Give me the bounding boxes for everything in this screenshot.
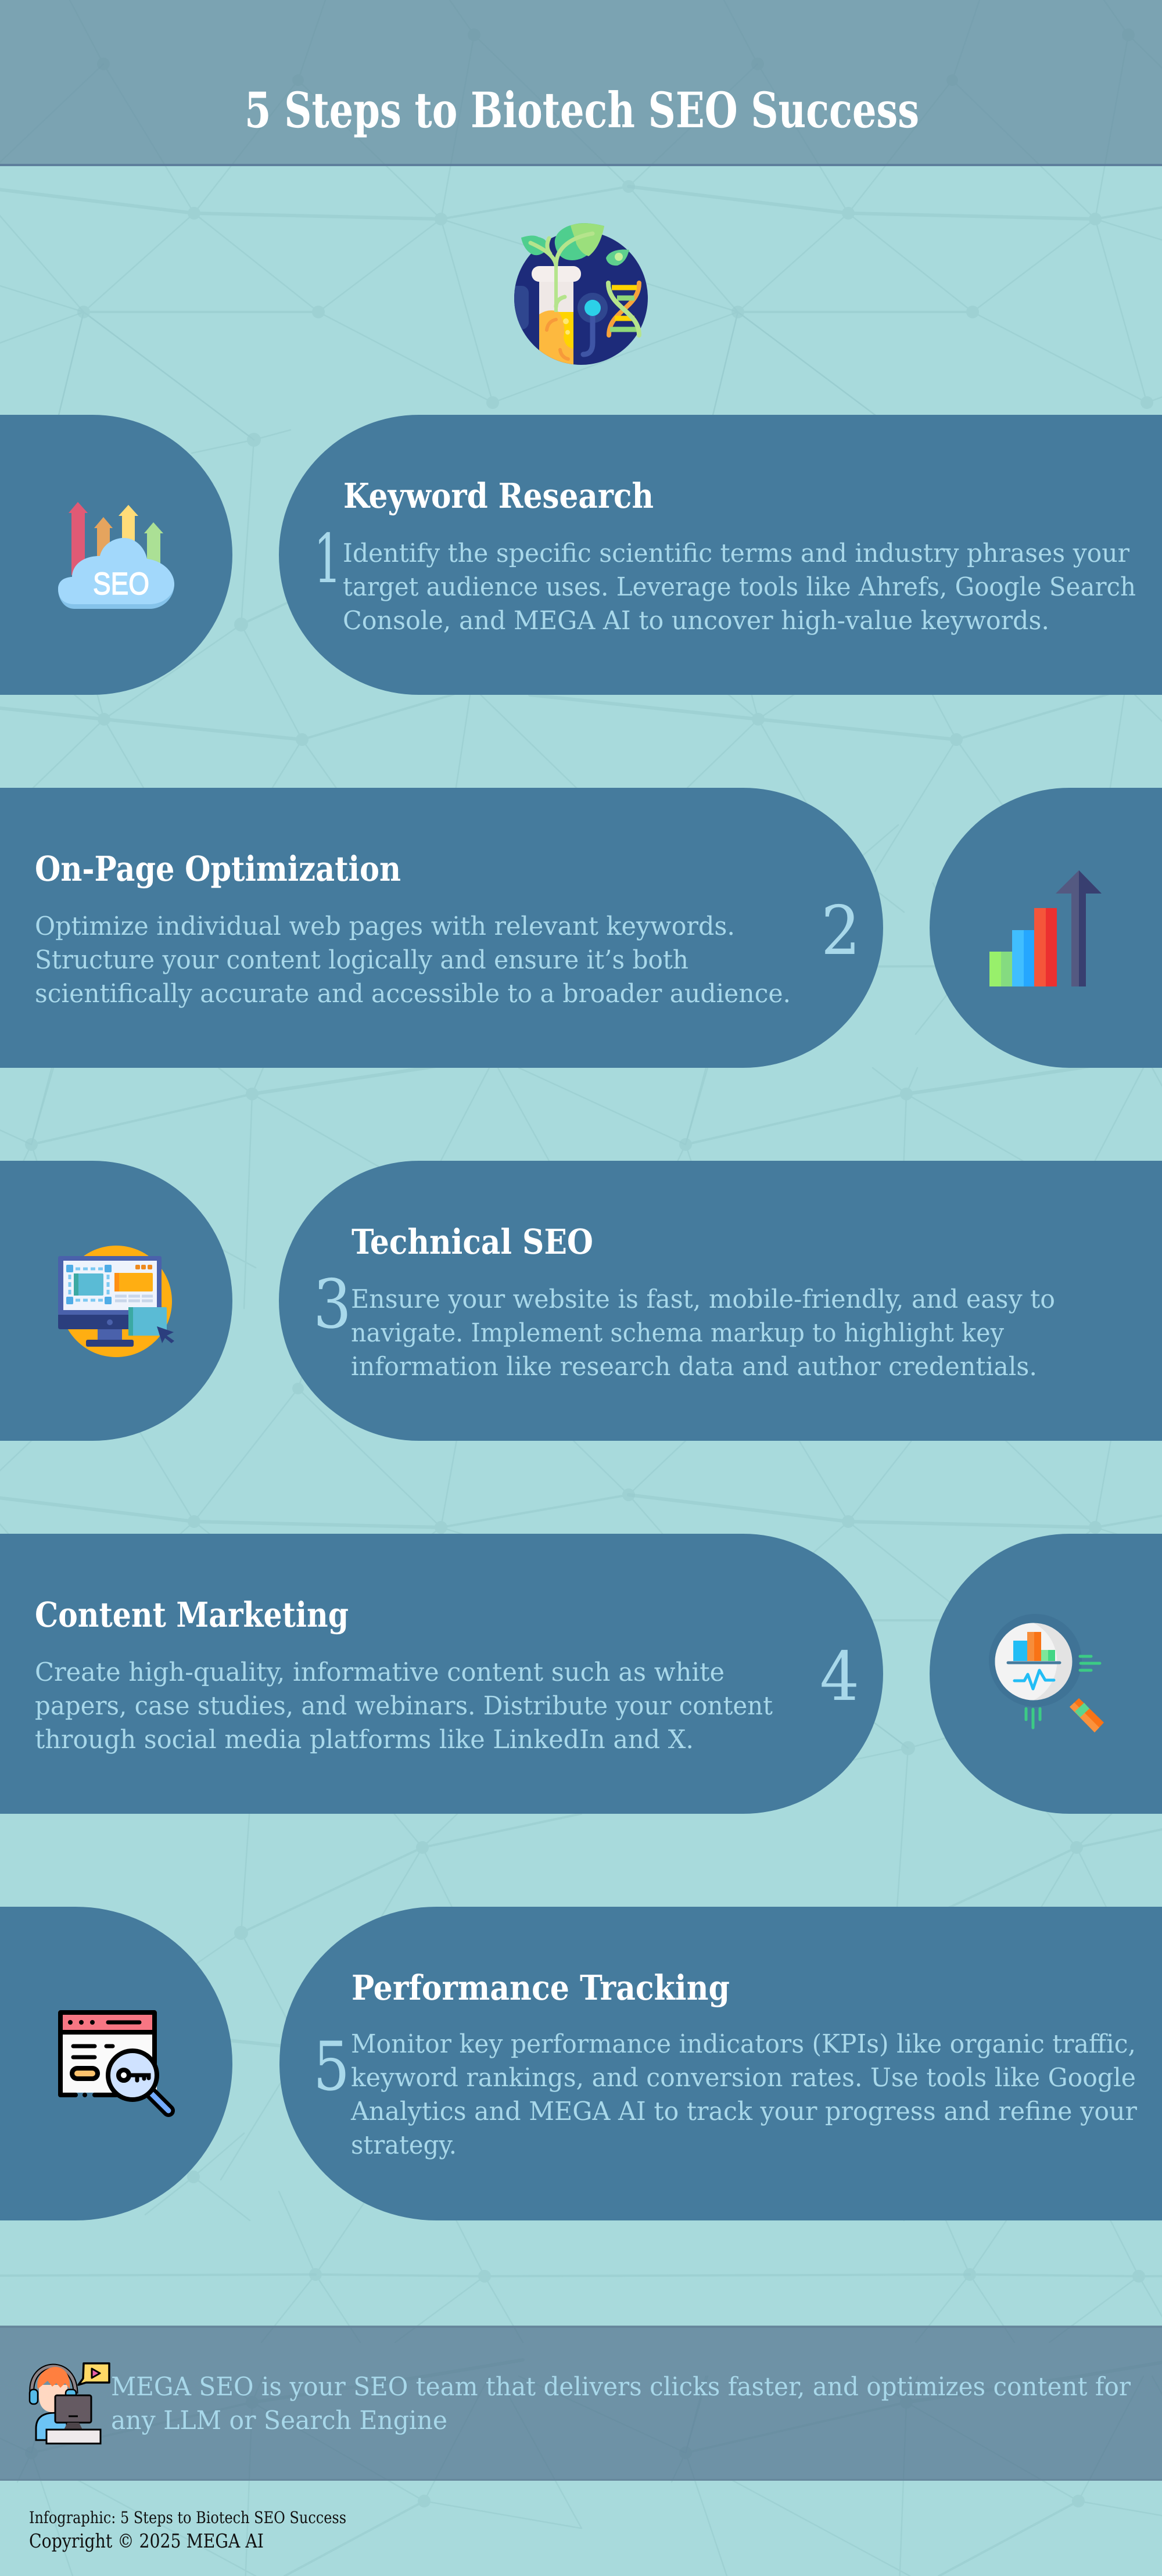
- callout text: [111, 2372, 1131, 2435]
- footer band: [0, 2326, 1162, 2481]
- step number 3: 3: [313, 1265, 352, 1344]
- icon panel: step 3: [0, 1161, 232, 1441]
- callout text: MEGA SEO is your SEO team that delivers clicks faster, and optimizes content for: [111, 2372, 1131, 2402]
- text panel: step 5: [279, 1907, 1162, 2220]
- text panel: step 3: [279, 1161, 1162, 1441]
- icon: person with headset at laptop: [30, 2363, 109, 2444]
- panel: step 4 content marketing: [0, 1534, 1162, 1814]
- icon panel: step 1: [0, 415, 232, 695]
- icon panel: step 4: [930, 1534, 1162, 1814]
- body: keyword research: [343, 539, 1136, 636]
- header band: [0, 0, 1162, 166]
- panel: step 2 on-page optimization: [0, 788, 1162, 1068]
- heading: technical SEO: Technical SEO: [352, 1222, 593, 1262]
- body: technical SEO: [351, 1285, 1055, 1382]
- body: performance tracking: keyword rankings, and conversion rates. Use tools like Google: [351, 2063, 1136, 2093]
- icon: rising bar chart with arrow: [989, 870, 1102, 986]
- step number 1: 1: [314, 520, 342, 598]
- body: technical SEO: navigate. Implement schema markup to highlight key: [351, 1318, 1005, 1348]
- icon: monitor with layout blocks and cursor: [58, 1246, 174, 1357]
- body: on-page optimization: Structure your content logically and ensure it’s both: [35, 945, 688, 975]
- text panel: step 1: [279, 415, 1162, 695]
- body: keyword research: Console, and MEGA AI to uncover high-value keywords.: [343, 606, 1049, 636]
- body: content marketing: papers, case studies, and webinars. Distribute your content: [35, 1691, 773, 1721]
- body: on-page optimization: scientifically accurate and accessible to a broader audience.: [35, 979, 791, 1009]
- icon panel: step 5: [0, 1907, 232, 2220]
- body: on-page optimization: Optimize individual web pages with relevant keywords.: [35, 912, 735, 941]
- title: 5 Steps to Biotech SEO Success: [245, 81, 919, 139]
- body: technical SEO: Ensure your website is fast, mobile-friendly, and easy to: [351, 1285, 1055, 1314]
- body: content marketing: [35, 1657, 773, 1755]
- heading: keyword research: Keyword Research: [343, 476, 654, 516]
- body: keyword research: Identify the specific scientific terms and industry phrases your: [343, 539, 1129, 568]
- body: performance tracking: Analytics and MEGA AI to track your progress and refine your: [350, 2097, 1137, 2126]
- icon: SEO cloud with arrows: SEO: [93, 566, 149, 601]
- text panel: step 2: [0, 788, 883, 1068]
- body: content marketing: Create high-quality, informative content such as white: [35, 1657, 725, 1687]
- body: performance tracking: strategy.: [351, 2130, 457, 2160]
- body: technical SEO: information like research data and author credentials.: [351, 1352, 1037, 1382]
- panel: step 1 keyword research: [0, 415, 1162, 695]
- icon: SEO cloud with arrows: [58, 502, 174, 609]
- text panel: step 4: [0, 1534, 883, 1814]
- heading: on-page optimization: On-Page Optimization: [35, 849, 401, 889]
- body: performance tracking: [350, 2029, 1137, 2160]
- body: performance tracking: Monitor key performance indicators (KPIs) like organic traffic,: [351, 2029, 1136, 2059]
- body: content marketing: through social media platforms like LinkedIn and X.: [35, 1725, 694, 1755]
- copyright: Copyright © 2025 MEGA AI: [29, 2530, 264, 2552]
- heading: content marketing: Content Marketing: [35, 1595, 349, 1635]
- step number 4: 4: [820, 1638, 859, 1716]
- callout text: any LLM or Search Engine: [111, 2406, 447, 2435]
- body: keyword research: target audience uses. Leverage tools like Ahrefs, Google Search: [343, 572, 1136, 602]
- footer caption: Infographic: 5 Steps to Biotech SEO Success: [29, 2508, 346, 2527]
- icon: magnifier with analytics: [989, 1614, 1104, 1732]
- icon: biotech plant, test tube and DNA: [505, 223, 648, 367]
- panel: step 5 performance tracking: [0, 1907, 1162, 2220]
- icon panel: step 2: [930, 788, 1162, 1068]
- step number 2: 2: [821, 892, 860, 970]
- body: on-page optimization: [35, 912, 791, 1009]
- panel: step 3 technical SEO: [0, 1161, 1162, 1441]
- heading: performance tracking: Performance Tracking: [352, 1968, 730, 2008]
- icon: browser window with keyword magnifier: [58, 2010, 168, 2111]
- step number 5: 5: [313, 2028, 350, 2106]
